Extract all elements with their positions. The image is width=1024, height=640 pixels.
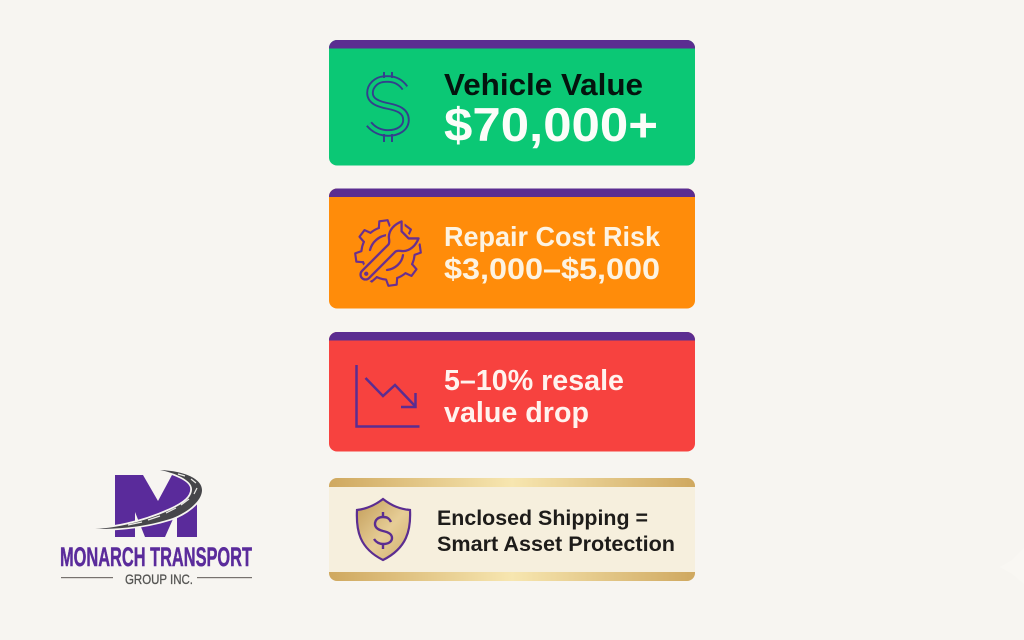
panel: enclosed shipping [329, 478, 695, 581]
text: resale drop line one: 5–10% resale [444, 365, 624, 397]
icon: gear and wrench [350, 215, 426, 291]
logo: monarch transport group [60, 470, 252, 587]
infographic canvas [60, 40, 695, 584]
panel: resale value drop [329, 332, 695, 452]
icon: falling chart [356, 365, 420, 426]
panel: repair cost risk [329, 188, 695, 308]
logo subtitle: GROUP INC. [125, 571, 193, 587]
logo mark: M with road [95, 470, 202, 537]
icon: shield with dollar [357, 499, 410, 560]
heading: repair cost risk: Repair Cost Risk [444, 221, 661, 252]
figure: repair cost range: $3,000–$5,000 [444, 253, 660, 286]
heading: vehicle value: Vehicle Value [444, 68, 643, 102]
text: resale drop line two: value drop [444, 397, 589, 429]
figure: vehicle value amount: $70,000+ [444, 98, 658, 151]
text: enclosed shipping line two: Smart Asset Protection [437, 532, 675, 556]
text: enclosed shipping line one: Enclosed Shipping = [437, 507, 648, 530]
panel: vehicle value [329, 40, 695, 166]
logo name: MONARCH TRANSPORT [60, 542, 252, 572]
icon: dollar sign [369, 72, 406, 142]
